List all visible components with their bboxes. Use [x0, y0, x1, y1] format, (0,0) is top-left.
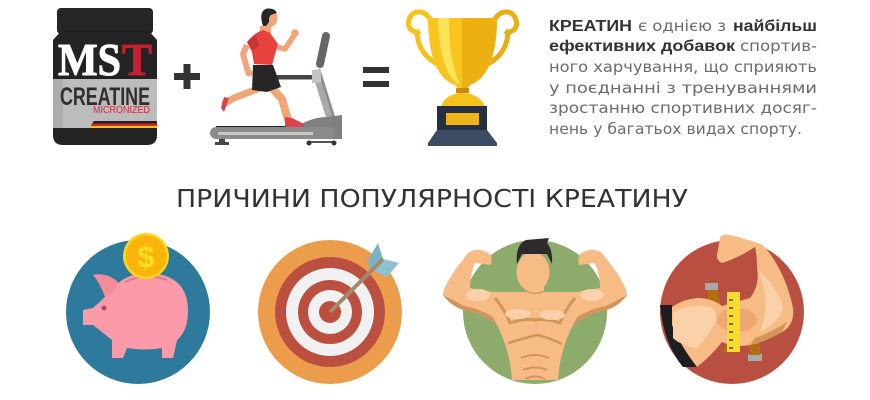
text block: creatine description: у поєднанні з тренуваннями: [549, 79, 817, 97]
text block: creatine description: ефективних добавок: [549, 38, 736, 55]
text block: creatine description: є однією з: [638, 17, 726, 35]
text block: creatine description: КРЕАТИН: [549, 18, 632, 35]
icon: piggy bank: $: [137, 239, 155, 274]
icon: plus: [174, 64, 200, 89]
treadmill: [210, 36, 342, 146]
heading: ПРИЧИНИ ПОПУЛЯРНОСТІ КРЕАТИНУ: [176, 184, 688, 213]
icon: runner on treadmill: [210, 8, 342, 146]
icon: MST creatine jar: [53, 8, 157, 145]
text block: creatine description: зростанню спортивних досяг-: [549, 99, 817, 117]
runner: [221, 8, 304, 127]
icon: MST creatine jar: CREATINE: [60, 83, 150, 111]
text block: creatine description: спортив-: [740, 37, 817, 55]
icon: MST creatine jar: MS: [58, 34, 121, 85]
text block: creatine description: нень у багатьох видах спорту.: [549, 120, 802, 138]
icon: muscular man: [443, 238, 627, 384]
icon: MST creatine jar: T: [122, 34, 152, 85]
icon: MST creatine jar: MICRONIZED: [93, 105, 150, 116]
icon: equals: [363, 67, 389, 87]
text block: creatine description: ного харчування, що сприяють: [549, 58, 817, 76]
icon: target with arrow: [258, 240, 402, 384]
icon: gold trophy: [408, 12, 517, 146]
text block: creatine description: найбільш: [733, 18, 817, 35]
icon: piggy bank: [66, 233, 210, 384]
text block: creatine description: [549, 17, 817, 138]
icon: flexed arm with measuring tape: [660, 234, 804, 384]
